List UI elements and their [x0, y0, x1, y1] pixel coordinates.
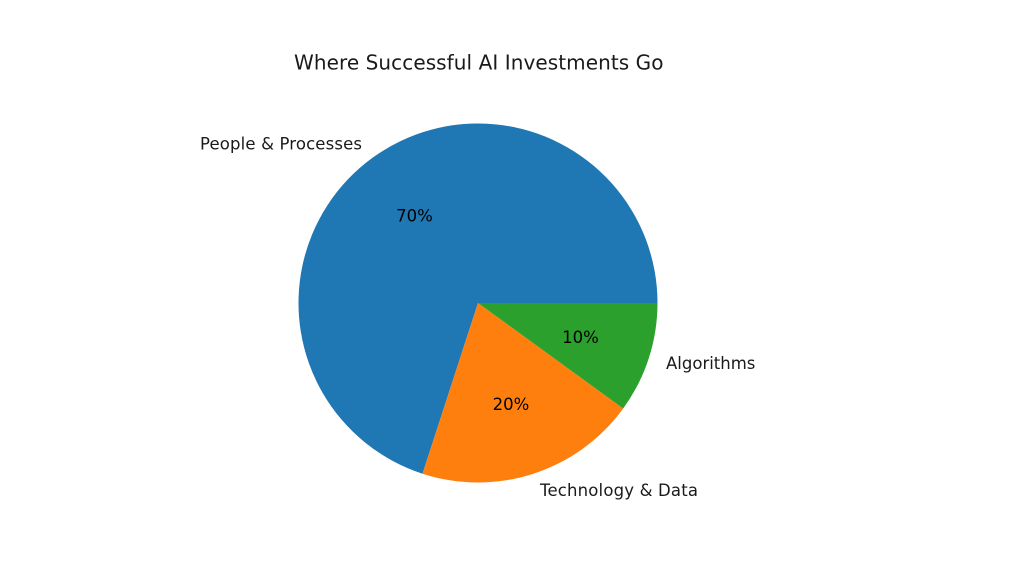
value: 70%: 70%: [396, 206, 433, 226]
label: Technology & Data: Technology & Data: [539, 481, 698, 500]
slice: Technology & Data 20%: [422, 303, 623, 482]
slice: Algorithms 10%: [478, 303, 658, 408]
value: 10%: 10%: [562, 328, 599, 347]
slice: People & Processes 70%: [298, 123, 658, 474]
label: People & Processes: People & Processes: [200, 134, 362, 154]
pie chart: [298, 123, 658, 482]
label: Algorithms: Algorithms: [666, 354, 755, 373]
title: Where Successful AI Investments Go: [294, 50, 664, 74]
value: 20%: 20%: [493, 395, 529, 414]
